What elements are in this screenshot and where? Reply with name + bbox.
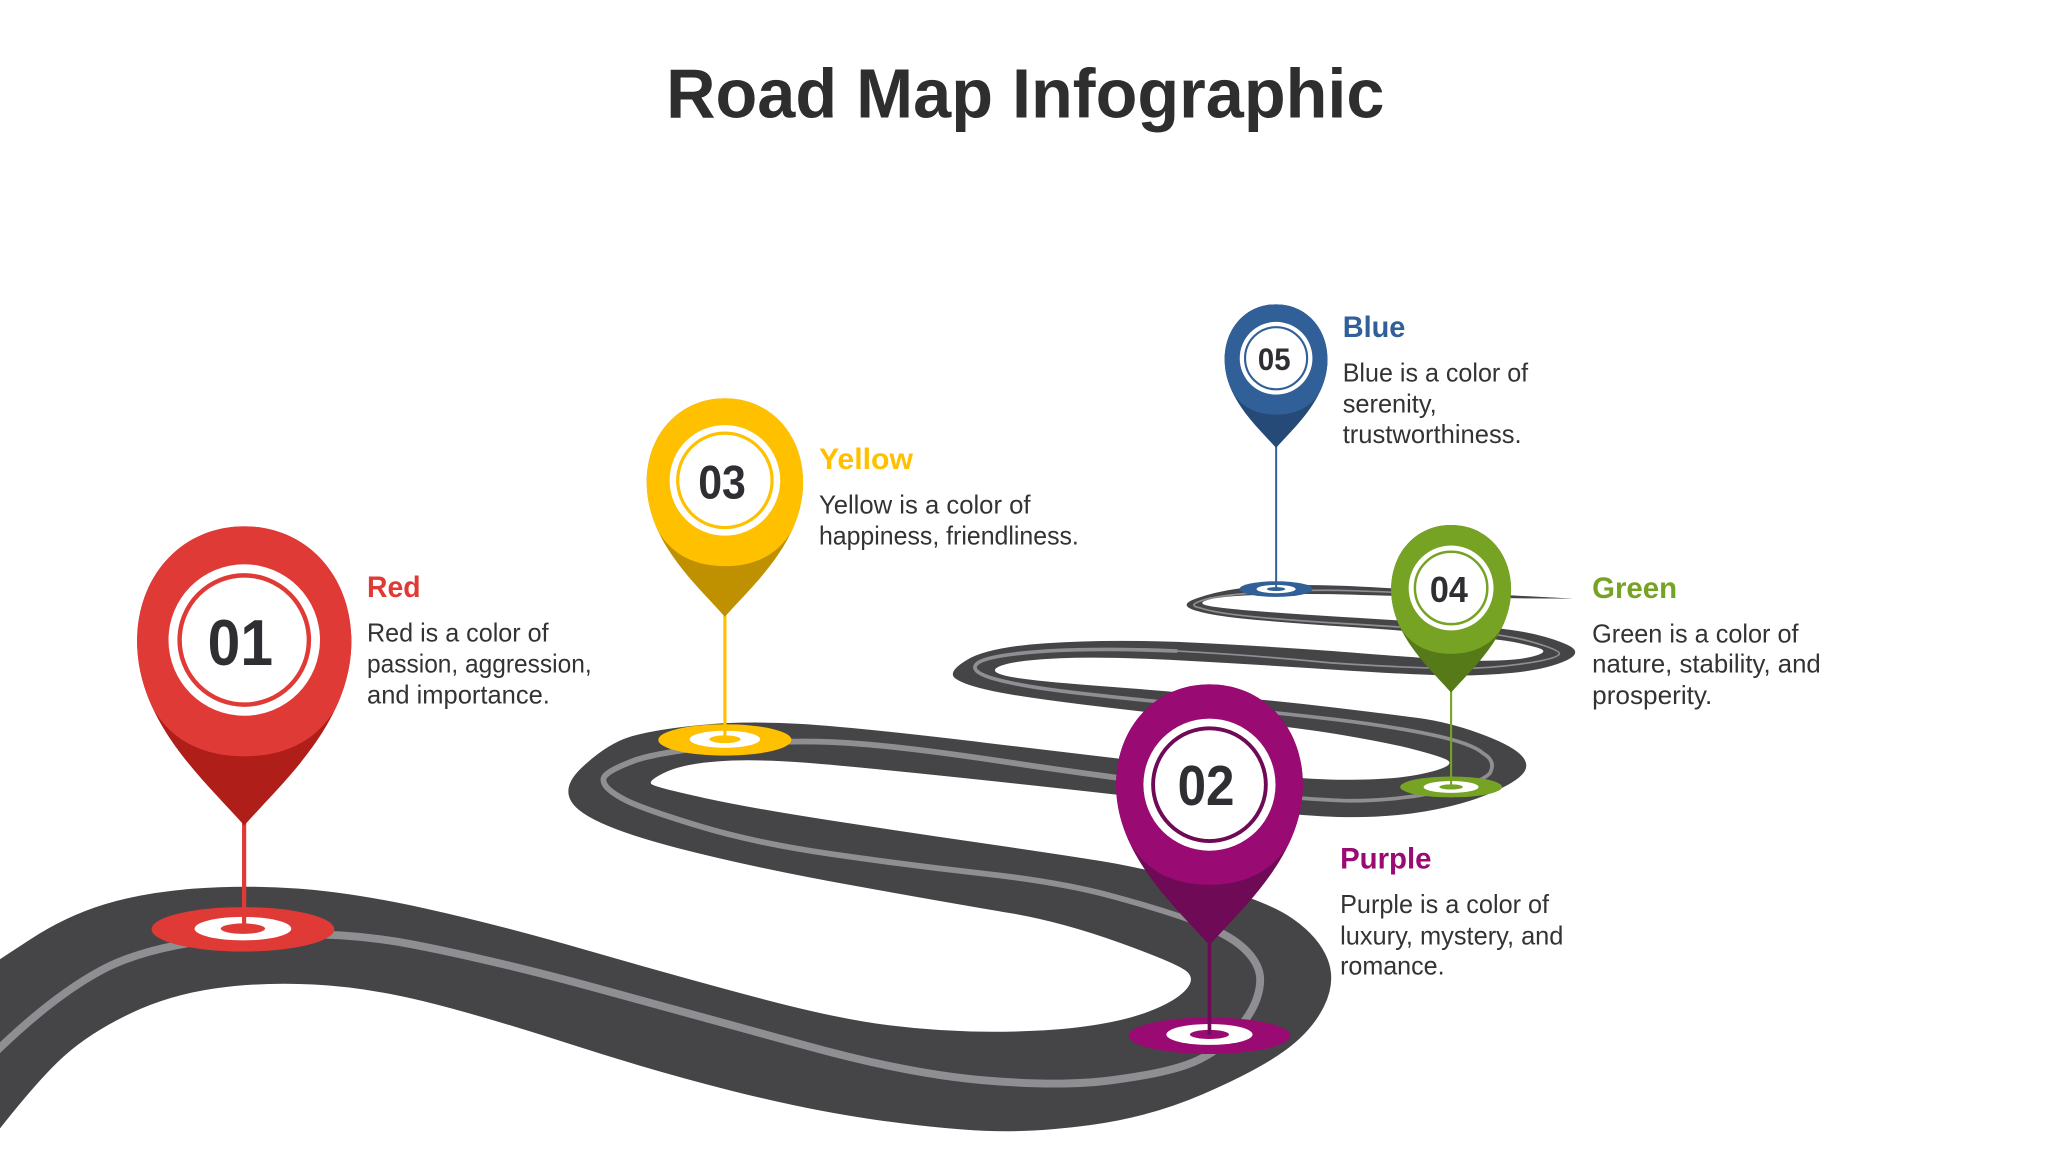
text block: Green: Green is a color of: [1592, 619, 1799, 649]
pin: [1225, 304, 1327, 448]
text block: Green: prosperity.: [1592, 680, 1712, 710]
text block: Red: [367, 571, 592, 709]
title: Road Map Infographic: [666, 55, 1384, 133]
road target: [1128, 1017, 1290, 1054]
text block: Purple: Purple is a color of: [1340, 889, 1550, 919]
marker 04 green: [1391, 525, 1511, 797]
text block: Green: [1592, 572, 1821, 710]
text block: Yellow: Yellow is a color of: [819, 489, 1031, 519]
text block: Yellow: happiness, friendliness.: [819, 521, 1079, 551]
text block: Blue: serenity,: [1343, 389, 1437, 419]
text block: Yellow: Yellow: [819, 443, 914, 476]
center line: second section: [603, 741, 1208, 921]
text block: Blue: Blue is a color of: [1343, 357, 1529, 387]
text block: Blue: [1343, 311, 1529, 449]
road target: [658, 724, 792, 756]
text block: Red: and importance.: [367, 679, 550, 709]
winding road: [0, 585, 1575, 1137]
text block: Purple: [1340, 843, 1563, 980]
text block: Blue: trustworthiness.: [1343, 419, 1522, 449]
text block: Red: Red is a color of: [367, 617, 549, 647]
text block: Green: nature, stability, and: [1592, 649, 1821, 679]
pin: [137, 526, 351, 825]
road target: [152, 907, 334, 952]
text block: Purple: Purple: [1340, 843, 1432, 876]
center line: near section: [0, 921, 1260, 1084]
pin: 04: [1430, 569, 1469, 610]
text block: Purple: romance.: [1340, 950, 1445, 980]
text block: Green: Green: [1592, 572, 1677, 605]
text block: Red: Red: [367, 571, 421, 604]
road target: [1240, 581, 1313, 597]
stem: [242, 816, 246, 927]
marker 05 blue: [1225, 304, 1327, 597]
text block: Purple: luxury, mystery, and: [1340, 920, 1563, 950]
text block: Blue: Blue: [1343, 311, 1405, 344]
marker 02 purple: [1116, 684, 1303, 1054]
center line: third section: [975, 649, 1492, 801]
pin: 01: [208, 606, 273, 679]
stem: [1208, 940, 1211, 1034]
road target: [1400, 776, 1502, 797]
text block: Yellow: [819, 443, 1079, 551]
pin: 02: [1178, 754, 1235, 818]
pin: [1116, 684, 1303, 945]
pin: 05: [1258, 342, 1291, 377]
center line: far section: [1177, 590, 1559, 668]
stem: [1450, 688, 1452, 786]
pin: [647, 398, 803, 617]
text block: Red: passion, aggression,: [367, 649, 592, 679]
marker 03 yellow: [647, 398, 803, 756]
pin: 03: [698, 456, 746, 509]
marker 01 red: [137, 526, 351, 952]
pin: [1391, 525, 1511, 693]
stem: [723, 611, 726, 738]
stem: [1275, 444, 1277, 589]
road surface: [0, 585, 1575, 1137]
